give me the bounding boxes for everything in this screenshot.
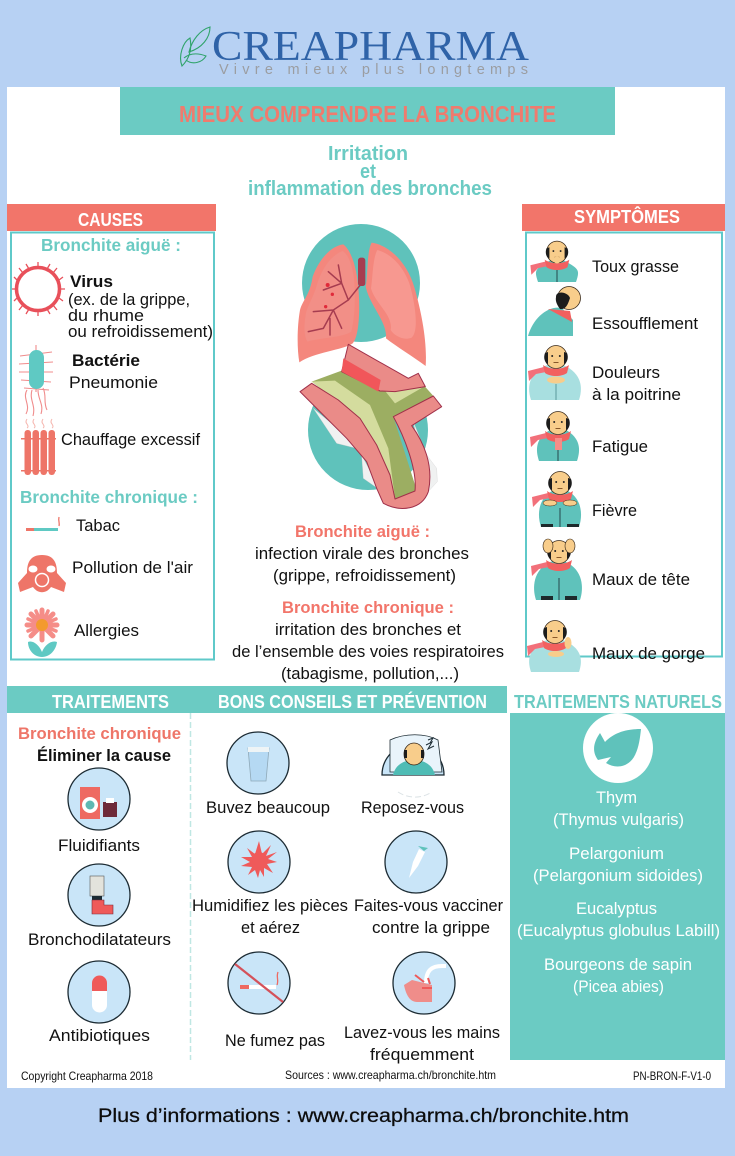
heading: bronchite aiguë: Bronchite aiguë : — [41, 235, 181, 255]
panel: advice — [192, 732, 503, 1064]
icon: humidifier burst — [228, 831, 290, 893]
icon: breathless — [528, 286, 580, 336]
icon: inhaler — [68, 864, 130, 926]
heading bars: BONS CONSEILS ET PRÉVENTION — [218, 691, 487, 712]
text: virus: Virus — [70, 272, 113, 291]
text: antibiotiques: Antibiotiques — [49, 1026, 150, 1045]
text block: bronchite chronique: (tabagisme, pollution,...) — [281, 664, 459, 683]
text: pelargonium: (Pelargonium sidoides) — [533, 866, 703, 885]
panel: symptoms — [522, 204, 725, 672]
heading bars — [7, 686, 507, 713]
icon: cough — [530, 241, 578, 282]
lungs — [298, 243, 426, 366]
text: eucalyptus: Eucalyptus — [576, 899, 657, 918]
icon: cigarette — [26, 517, 59, 531]
text: lavez: fréquemment — [370, 1045, 474, 1064]
text: toux grasse: Toux grasse — [592, 257, 679, 276]
subtitle: inflammation des bronches — [248, 177, 492, 200]
icon: bacteria — [19, 345, 53, 416]
icon: fever — [532, 472, 581, 527]
icon: radiator — [21, 419, 56, 475]
text: virus: (ex. de la grippe, — [68, 290, 190, 309]
text: fluidifiants: Fluidifiants — [58, 836, 140, 855]
icon: fatigue — [530, 412, 579, 461]
text: bronchodilatateurs: Bronchodilatateurs — [28, 930, 171, 949]
text: sapin — [544, 955, 692, 996]
text: bacterie: Bactérie — [72, 351, 140, 370]
text: thym — [553, 788, 684, 829]
text: eucalyptus — [517, 899, 720, 940]
text: maux de gorge: Maux de gorge — [592, 644, 705, 663]
text block: bronchite aiguë: (grippe, refroidissement) — [273, 566, 456, 585]
text: pollution: Pollution de l'air — [72, 558, 193, 577]
subtitle: Irritation — [328, 142, 408, 165]
text: chauffage: Chauffage excessif — [61, 430, 200, 449]
icon: sore throat — [527, 620, 581, 672]
text: virus — [68, 272, 213, 341]
text: vacciner: Faites-vous vacciner — [354, 896, 503, 915]
heading: eliminer la cause: Éliminer la cause — [37, 746, 171, 765]
icon: sleeping man — [382, 735, 444, 797]
text block: bronchite aiguë: infection virale des bronches — [255, 544, 469, 563]
text: bacterie — [69, 351, 158, 392]
icon: gas mask — [18, 555, 66, 592]
text: eucalyptus: (Eucalyptus globulus Labill) — [517, 921, 720, 940]
text: buvez: Buvez beaucoup — [206, 798, 330, 817]
text: douleurs: à la poitrine — [592, 385, 681, 404]
icon: chest pain — [528, 346, 581, 400]
text: fievre: Fièvre — [592, 501, 637, 520]
bronchus — [300, 344, 442, 508]
title banner — [120, 87, 615, 135]
text: thym: (Thymus vulgaris) — [553, 810, 684, 829]
footer: copyright: Copyright Creapharma 2018 — [21, 1069, 153, 1083]
text: humidifiez — [192, 896, 348, 937]
symptoms heading: SYMPTÔMES — [574, 206, 680, 227]
text block: bronchite chronique — [232, 598, 504, 683]
text block: bronchite chronique: Bronchite chronique : — [282, 598, 454, 617]
icon: hand washing — [393, 952, 455, 1014]
text: pelargonium — [533, 844, 703, 885]
icon: flower — [27, 610, 57, 657]
subtitle: et — [360, 160, 376, 183]
text: vacciner: contre la grippe — [372, 918, 490, 937]
causes heading: CAUSES — [78, 210, 143, 230]
text: bacterie: Pneumonie — [69, 373, 158, 392]
text: douleurs: Douleurs — [592, 363, 660, 382]
title banner: MIEUX COMPRENDRE LA BRONCHITE — [179, 101, 556, 127]
text: douleurs — [592, 363, 681, 404]
heading bars: TRAITEMENTS — [52, 692, 169, 712]
icon: leaf — [583, 713, 653, 783]
icon: headache — [531, 539, 582, 600]
causes heading — [7, 204, 216, 231]
text: pelargonium: Pelargonium — [569, 844, 664, 863]
footer: reference code: PN-BRON-F-V1-0 — [633, 1069, 711, 1083]
icon: capsule — [68, 961, 130, 1023]
text: ne fumez pas: Ne fumez pas — [225, 1031, 325, 1050]
text block: bronchite aiguë — [255, 522, 469, 585]
text block: bronchite chronique: irritation des bronches et — [275, 620, 461, 639]
text: fatigue: Fatigue — [592, 437, 648, 456]
logo: Creapharma: Vivre mieux plus longtemps — [219, 62, 528, 78]
symptoms heading — [522, 204, 725, 231]
text: lavez — [344, 1023, 500, 1064]
subtitle — [248, 142, 492, 200]
text block: bronchite aiguë: Bronchite aiguë : — [295, 522, 430, 541]
logo: Creapharma: CREAPHARMA — [212, 24, 530, 70]
footer: more information link: Plus d’informations : www.creapharma.ch/bronchite.htm — [98, 1105, 629, 1127]
text: humidifiez: et aérez — [241, 918, 300, 937]
heading: eliminer la cause: Bronchite chronique — [18, 724, 181, 743]
footer: sources: Sources : www.creapharma.ch/bronchite.htm — [285, 1068, 496, 1082]
text: allergies: Allergies — [74, 621, 139, 640]
icon: virus — [12, 262, 65, 316]
heading: eliminer la cause — [18, 724, 181, 765]
text: lavez: Lavez-vous les mains — [344, 1023, 500, 1042]
text: sapin: Bourgeons de sapin — [544, 955, 692, 974]
text: sapin: (Picea abies) — [573, 977, 664, 996]
text: vacciner — [354, 896, 503, 937]
text: virus: du rhume — [68, 306, 144, 325]
panel: causes — [7, 204, 216, 660]
panel: natural treatments — [510, 687, 725, 1060]
text: humidifiez: Humidifiez les pièces — [192, 896, 348, 915]
icon: fluidifiants — [68, 768, 130, 830]
text: virus: ou refroidissement) — [68, 322, 213, 341]
icon: no smoking — [228, 952, 290, 1014]
text: maux de tete: Maux de tête — [592, 570, 690, 589]
text: thym: Thym — [596, 788, 637, 807]
panel: treatments — [18, 724, 181, 1045]
text: tabac: Tabac — [76, 516, 120, 535]
heading: bronchite chronique: Bronchite chronique : — [20, 487, 198, 507]
text: essoufflement: Essoufflement — [592, 314, 698, 333]
text: reposez: Reposez-vous — [361, 798, 464, 817]
text block: bronchite chronique: de l’ensemble des voies respiratoires — [232, 642, 504, 661]
illustration: lungs and bronchus — [298, 224, 442, 508]
icon: glass — [227, 732, 289, 794]
icon: syringe — [385, 831, 447, 893]
